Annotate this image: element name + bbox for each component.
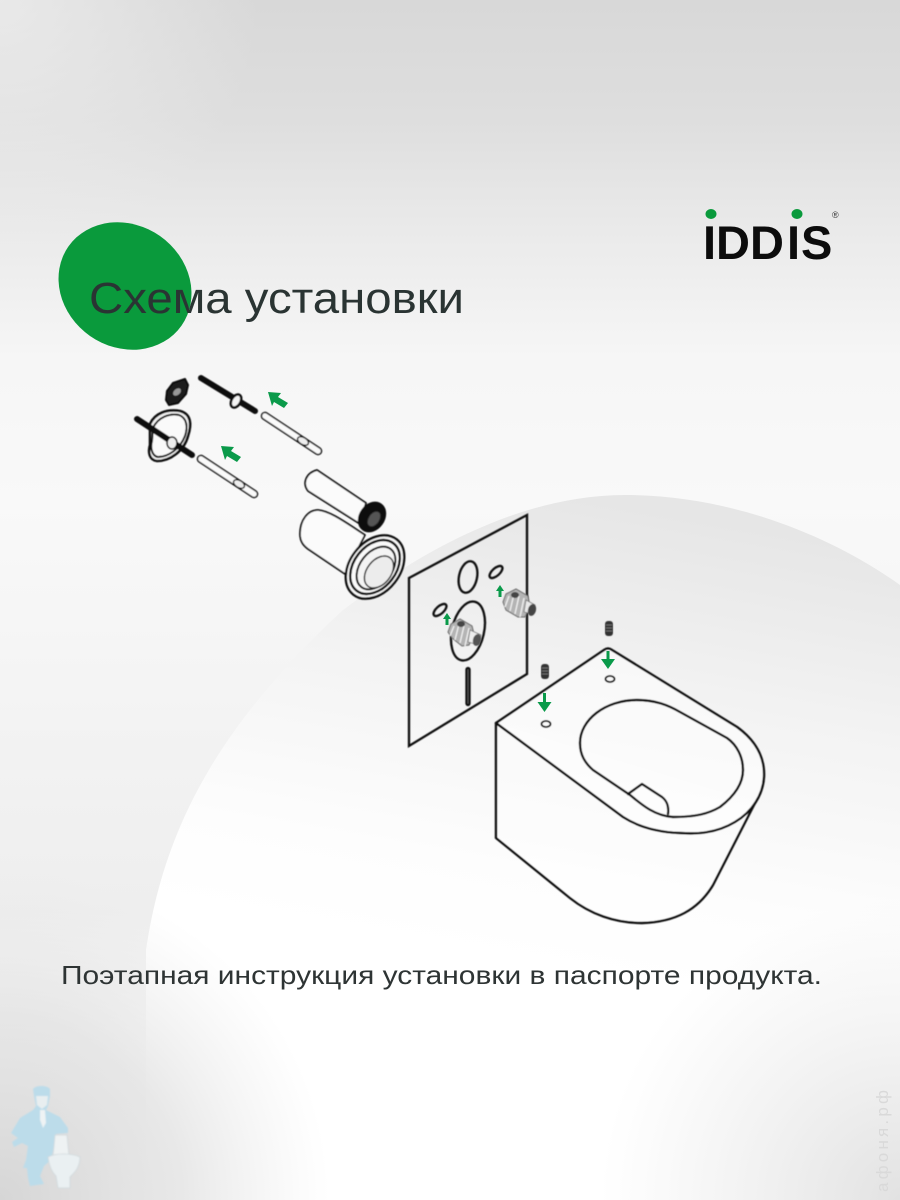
small green arrow right (496, 585, 504, 597)
green arrow: left screw (538, 693, 552, 712)
caption: Поэтапная инструкция установки в паспорте продукта. (61, 960, 822, 990)
bowl opening (580, 700, 743, 817)
plumber shirt and bow tie (40, 1110, 46, 1128)
lower pin (201, 459, 254, 494)
logo lettering: IDDIS (703, 216, 832, 269)
right slot (488, 564, 504, 580)
toilet watermark tank (53, 1135, 69, 1156)
small green arrow left (443, 613, 451, 625)
plumber face (36, 1096, 48, 1109)
rim flush shelf (628, 784, 668, 814)
title: Схема установки (89, 274, 464, 323)
left slot (432, 602, 448, 618)
green arrow: right screw (601, 651, 615, 669)
seat screw right (605, 621, 613, 636)
green arrow: lower pin (221, 446, 241, 462)
small drain pipe (305, 470, 391, 537)
flange with lower bolt (137, 411, 192, 461)
plate outline (409, 515, 527, 746)
green arrow: upper pin (268, 392, 288, 408)
plumber figure (11, 1086, 68, 1186)
narrow vertical slot (466, 668, 470, 705)
background disc (146, 495, 900, 1200)
exploded mounting hardware (137, 378, 416, 610)
seat hole left (542, 721, 550, 727)
watermark: site name: афоня.рф (873, 1090, 892, 1192)
watermark: plumber with toilet (11, 1086, 80, 1188)
registered mark: ® (832, 210, 839, 220)
large oval hole (446, 598, 490, 664)
wall fitting left (448, 619, 482, 647)
logo green dot right (792, 209, 802, 219)
seat hole right (606, 676, 614, 682)
toilet body (496, 723, 755, 923)
toilet top (496, 648, 764, 833)
toilet watermark bowl (48, 1154, 80, 1188)
wall fitting right (503, 589, 537, 617)
upper oval hole (456, 559, 480, 595)
green ellipse behind title (33, 196, 217, 376)
nut (166, 379, 188, 405)
logo green dot left (706, 209, 716, 219)
mounting plate (409, 515, 527, 746)
large drain pipe with collar (300, 510, 416, 610)
upper threaded bolt (201, 378, 255, 411)
seat screw left (541, 664, 549, 679)
logo: IDDIS (703, 209, 839, 269)
upper pin (265, 416, 318, 451)
toilet bowl (496, 648, 764, 923)
